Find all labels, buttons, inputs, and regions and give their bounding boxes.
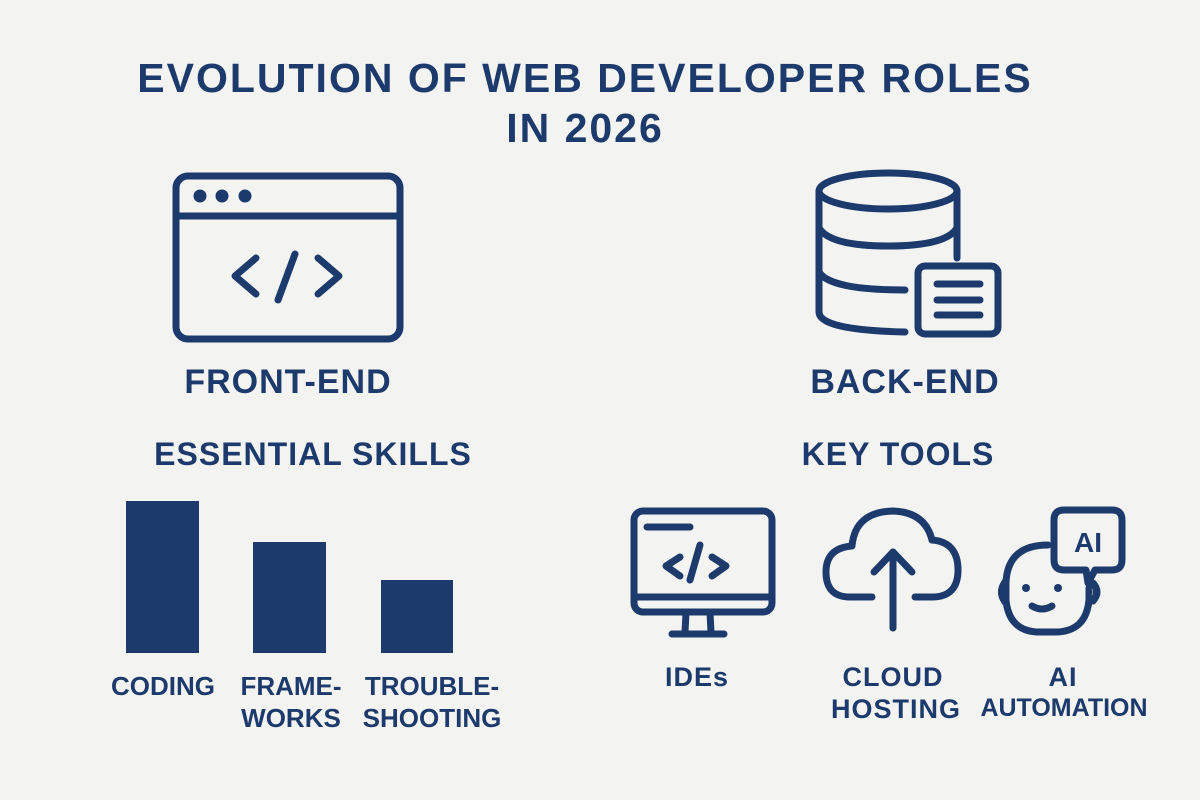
icon: IDE monitor (634, 511, 772, 634)
heading: front-end: FRONT-END (184, 363, 392, 401)
title: IN 2026 (506, 105, 664, 151)
labels: key tools: IDEs (665, 662, 729, 692)
icon: back-end database (819, 173, 998, 334)
bar chart: skills: WORKS (241, 703, 341, 733)
heading: back-end: BACK-END (810, 363, 1000, 401)
bar chart: skills: FRAME- (240, 671, 342, 701)
icon: AI robot (1002, 510, 1122, 632)
title: EVOLUTION OF WEB DEVELOPER ROLES (137, 55, 1033, 101)
labels: key tools: AUTOMATION (980, 694, 1148, 722)
labels: key tools: HOSTING (831, 694, 961, 724)
icon: front-end browser (176, 176, 400, 339)
labels: key tools: CLOUD (842, 662, 944, 692)
bar chart: skills: SHOOTING (363, 703, 501, 733)
bar chart: skills: TROUBLE- (365, 671, 499, 701)
heading: essential skills: ESSENTIAL SKILLS (154, 436, 472, 472)
icon: cloud upload (826, 511, 958, 628)
labels: key tools: AI (1048, 662, 1078, 692)
labels: key tools (665, 662, 1148, 724)
bar chart: skills (111, 501, 501, 733)
bar chart: skills: CODING (111, 671, 215, 701)
text: AI (1074, 527, 1102, 558)
title (137, 55, 1033, 151)
heading: key tools: KEY TOOLS (802, 436, 994, 472)
